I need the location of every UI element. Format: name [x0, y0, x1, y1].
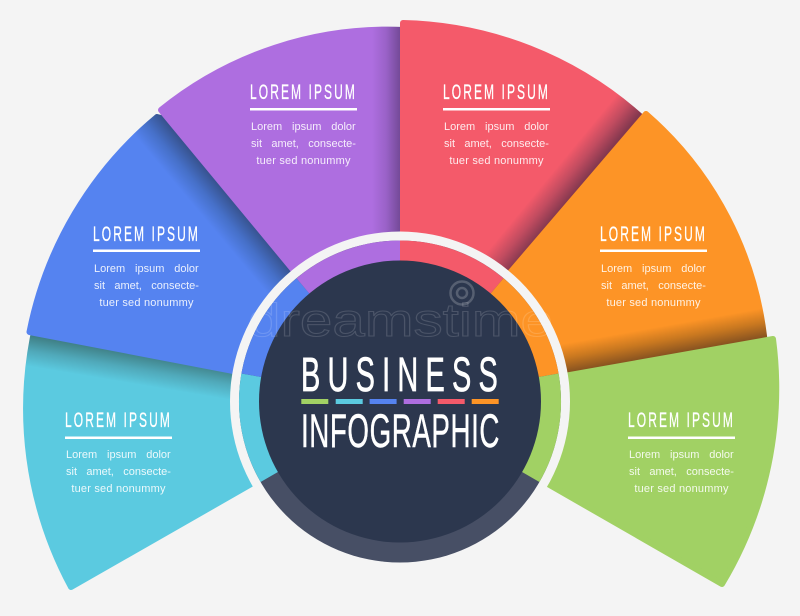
text block: cyan: Lorem ipsum dolor	[66, 449, 171, 461]
text block: purple: Lorem ipsum dolor	[251, 121, 356, 133]
text block: red: sit amet, consecte-	[444, 138, 549, 150]
text block: green: sit amet, consecte-	[629, 466, 734, 478]
heading: orange: LOREM IPSUM	[600, 223, 707, 246]
panel: red segment	[403, 23, 660, 401]
heading: cyan: LOREM IPSUM	[65, 409, 172, 432]
light ring	[230, 232, 570, 572]
text block: purple: sit amet, consecte-	[251, 138, 356, 150]
text block: blue: tuer sed nonummy	[99, 297, 194, 309]
text block: purple	[251, 121, 356, 167]
title: business: BUSINESS	[301, 349, 505, 402]
heading: red: LOREM IPSUM	[443, 81, 550, 104]
text block: red: tuer sed nonummy	[449, 155, 544, 167]
centre circle	[259, 260, 541, 542]
text block: cyan: tuer sed nonummy	[71, 483, 166, 495]
text block: blue: Lorem ipsum dolor	[94, 263, 199, 275]
colour key dashes	[301, 399, 499, 404]
text block: green	[629, 449, 734, 495]
centre ring bands	[239, 240, 561, 562]
text block: red: Lorem ipsum dolor	[444, 121, 549, 133]
heading: purple: LOREM IPSUM	[250, 81, 357, 104]
text block: cyan: sit amet, consecte-	[66, 466, 171, 478]
panel: purple segment	[161, 30, 404, 399]
text block: red	[444, 121, 549, 167]
text block: cyan	[66, 449, 171, 495]
watermark	[248, 282, 553, 346]
panel: orange segment	[401, 114, 765, 400]
panel: cyan segment	[26, 300, 400, 587]
title: infographic: INFOGRAPHIC	[301, 404, 500, 457]
text block: green: tuer sed nonummy	[634, 483, 729, 495]
text block: orange: tuer sed nonummy	[606, 297, 701, 309]
heading: blue: LOREM IPSUM	[93, 223, 200, 246]
text block: orange: sit amet, consecte-	[601, 280, 706, 292]
panel: blue segment	[30, 117, 400, 403]
panel: green segment	[400, 339, 776, 584]
text block: orange: Lorem ipsum dolor	[601, 263, 706, 275]
watermark: dreamstime	[248, 294, 553, 346]
text block: purple: tuer sed nonummy	[256, 155, 351, 167]
text block: green: Lorem ipsum dolor	[629, 449, 734, 461]
text block: blue: sit amet, consecte-	[94, 280, 199, 292]
text block: orange	[601, 263, 706, 309]
text block: blue	[94, 263, 199, 309]
